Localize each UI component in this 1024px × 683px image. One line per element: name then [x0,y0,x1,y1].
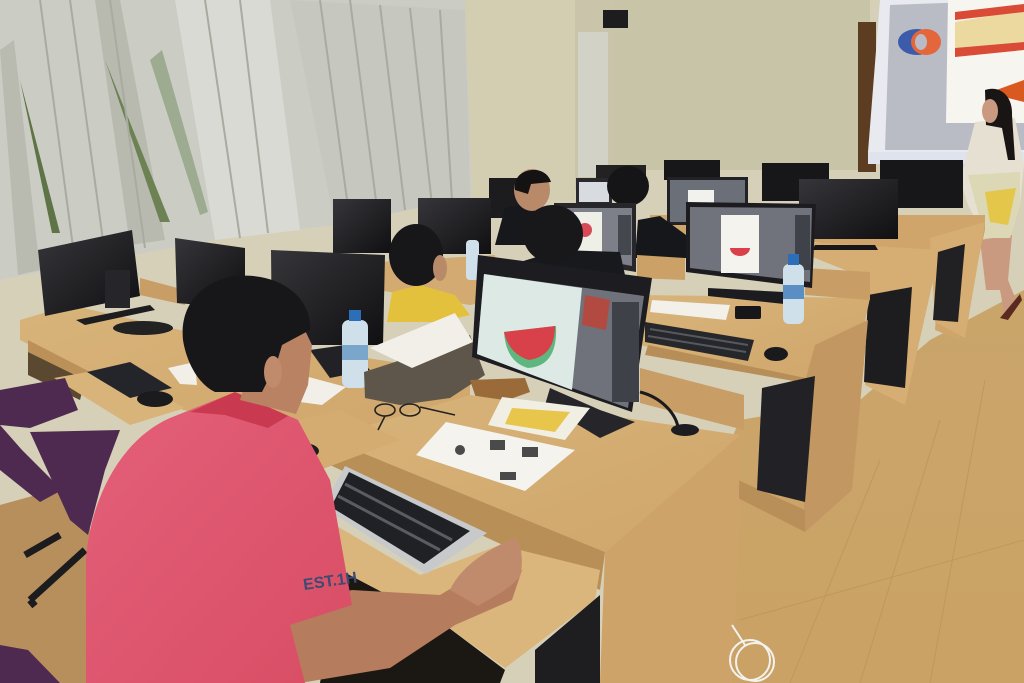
loose papers left desk [168,362,346,405]
front desk [280,368,744,683]
projection screen [868,0,1024,164]
middle row desk [637,255,870,532]
background students [495,166,686,258]
background desk under student [378,255,500,305]
front keyboard [323,466,487,574]
sleeve text: EST.1H [302,570,358,594]
small mouse [287,443,319,459]
bottle center [342,240,479,388]
center monitors [554,202,816,304]
chair base [25,535,85,606]
monitor far left [38,230,173,407]
monitor center left [271,250,385,378]
presenter woman [960,89,1024,320]
dark space under front desk [320,570,505,683]
window curtains [0,0,472,280]
keyboard and mouse middle [645,300,788,361]
back monitors [333,160,963,254]
back row desk [650,215,985,405]
monitor left center [175,238,245,305]
chairs [0,378,120,683]
middle student with dark hair [520,205,625,275]
front left desk [20,278,470,445]
glasses and pen [375,404,455,430]
student in yellow [387,224,470,322]
speaker [603,10,628,28]
main student in pink shirt [86,276,522,683]
back row pc towers [864,244,965,388]
wooden floor [0,290,1024,683]
water bottle right [783,254,804,324]
papers on front desk [416,397,590,491]
middle pc tower [757,376,815,502]
pc tower under front desk [535,595,600,683]
wall column shadow [858,22,876,172]
front monitor [472,255,699,438]
backpack and paper [364,313,530,410]
cable coil [730,625,774,681]
